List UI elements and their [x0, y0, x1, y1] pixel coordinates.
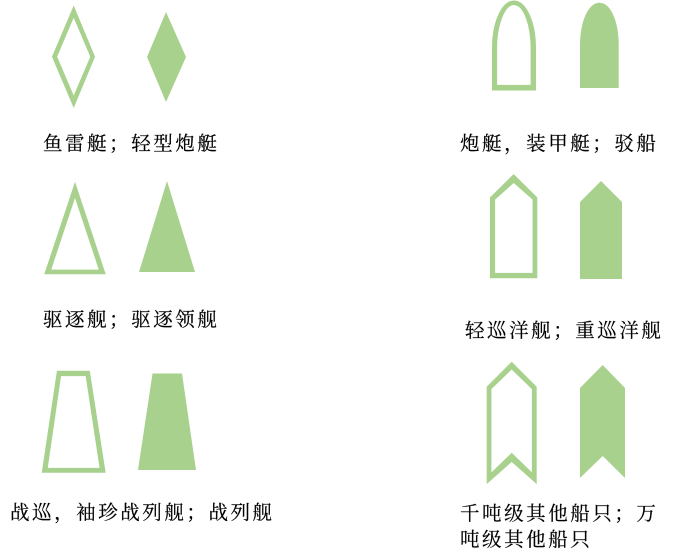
label: torpedo boats and light gunboats: 鱼雷艇；轻型炮艇	[43, 134, 219, 155]
label: destroyers and destroyer leaders: 驱逐舰；驱逐领舰	[43, 310, 219, 331]
icon: filled arch	[580, 3, 619, 88]
icon: filled chevron	[580, 365, 625, 478]
icon: filled diamond	[147, 12, 186, 102]
icon: outlined pentagon	[490, 175, 537, 278]
label: battlecruisers and battleships: 战巡，袖珍战列舰；战列舰	[10, 503, 275, 524]
icon: outlined trapezoid	[42, 371, 105, 472]
icon: outlined arch	[492, 1, 536, 90]
icon: filled triangle	[139, 181, 195, 272]
icon: filled pentagon	[580, 181, 622, 279]
icon: outlined triangle	[45, 183, 105, 274]
label: gunboats, armored boats and barges: 炮艇，装甲艇；驳船	[460, 134, 658, 155]
label: other ships by tonnage: 千吨级其他船只；万	[460, 504, 658, 525]
icon: filled trapezoid	[138, 374, 196, 470]
icon: outlined diamond	[52, 6, 95, 107]
icon: outlined chevron	[487, 362, 536, 483]
label: light and heavy cruisers: 轻巡洋舰；重巡洋舰	[465, 321, 663, 342]
label: other ships by tonnage	[460, 503, 658, 551]
label: other ships by tonnage: 吨级其他船只	[460, 530, 592, 551]
